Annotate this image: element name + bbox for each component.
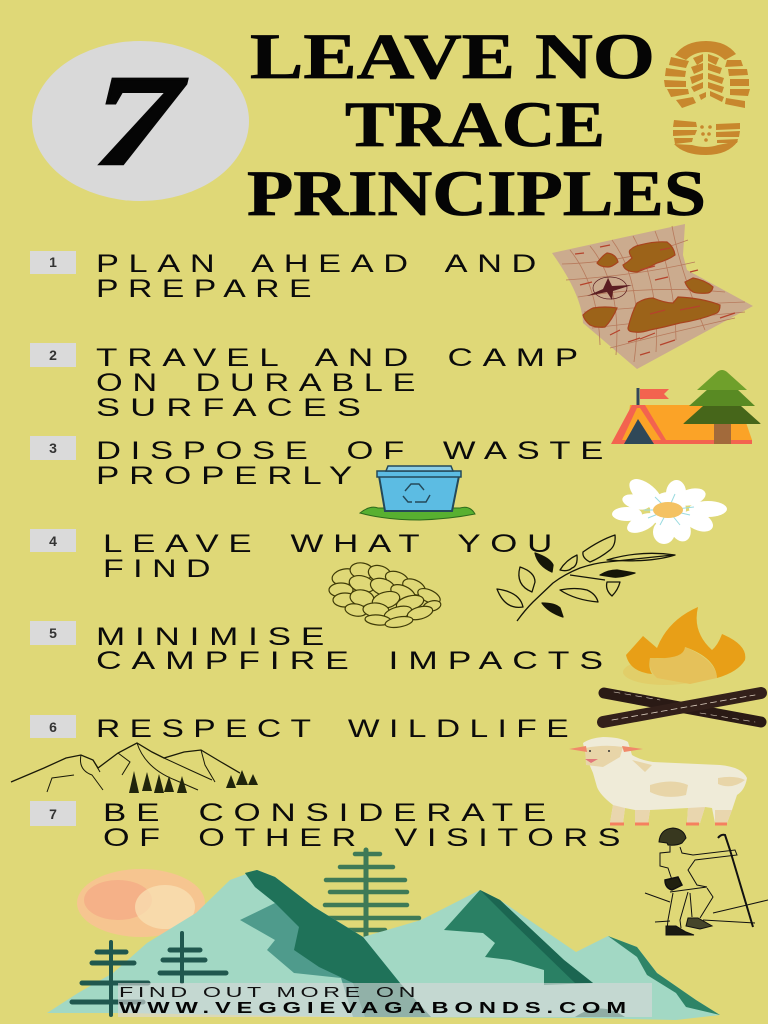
banner: find out more: FIND OUT MORE ON <box>119 984 420 1001</box>
principle 4: FIND <box>103 555 220 583</box>
principle 2: 2 <box>49 347 57 363</box>
title <box>247 21 706 230</box>
illustration: sun <box>77 869 205 937</box>
principle 2: SURFACES <box>96 394 371 422</box>
title: TRACE <box>345 89 605 161</box>
principle 4: LEAVE WHAT YOU <box>103 530 562 558</box>
principle 7: OF OTHER VISITORS <box>103 824 630 852</box>
principle 1: PLAN AHEAD AND <box>96 250 546 278</box>
principle 5: MINIMISE <box>96 623 334 651</box>
principle 2: ON DURABLE <box>96 369 425 397</box>
principle 5: 5 <box>49 625 57 641</box>
icon: boot prints <box>664 41 750 155</box>
principle 3: DISPOSE OF WASTE <box>96 437 613 465</box>
banner: find out more <box>118 983 652 1017</box>
icon: recycling bin on grass <box>360 466 475 520</box>
illustration: small pine trees <box>72 933 226 1015</box>
grey circle with number 7: 7 <box>93 49 188 193</box>
icon: daisy flower <box>612 473 727 545</box>
principle 5: CAMPFIRE IMPACTS <box>96 647 613 675</box>
title: PRINCIPLES <box>247 158 706 230</box>
principle 7 <box>30 799 630 852</box>
illustration: tall pine tree <box>320 850 419 936</box>
icon: crossed logs <box>603 692 761 722</box>
principle 2: TRAVEL AND CAMP <box>96 344 588 372</box>
icon: tent and pine tree <box>611 370 761 444</box>
principle 1 <box>30 250 546 303</box>
principle 4: 4 <box>49 533 57 549</box>
principle 3: 3 <box>49 440 57 456</box>
principle 4 <box>30 529 562 583</box>
principle 3: PROPERLY <box>96 462 362 490</box>
icon: pine cone <box>329 561 442 629</box>
principle 1: PREPARE <box>96 275 321 303</box>
principle 2 <box>30 343 588 422</box>
title: LEAVE NO <box>250 21 655 93</box>
icon: leafy branch <box>497 535 675 621</box>
icon: treasure map <box>552 224 753 369</box>
principle 1: 1 <box>49 254 57 270</box>
principle 6 <box>30 715 578 743</box>
icon: campfire flame <box>623 607 745 685</box>
illustration: watercolour mountains <box>47 870 720 1020</box>
principle 7: 7 <box>49 806 57 822</box>
principle 6: 6 <box>49 719 57 735</box>
principle 6: RESPECT WILDLIFE <box>96 715 578 743</box>
principle 3 <box>30 436 613 490</box>
principle 5 <box>30 621 613 675</box>
principle 7: BE CONSIDERATE <box>103 799 556 827</box>
banner: find out more: WWW.VEGGIEVAGABONDS.COM <box>119 1000 632 1017</box>
icon: mountain line drawing <box>11 743 258 793</box>
grey circle with number 7 <box>32 41 249 201</box>
icon: sheep <box>569 737 747 824</box>
icon: hiker with walking stick <box>645 828 768 935</box>
